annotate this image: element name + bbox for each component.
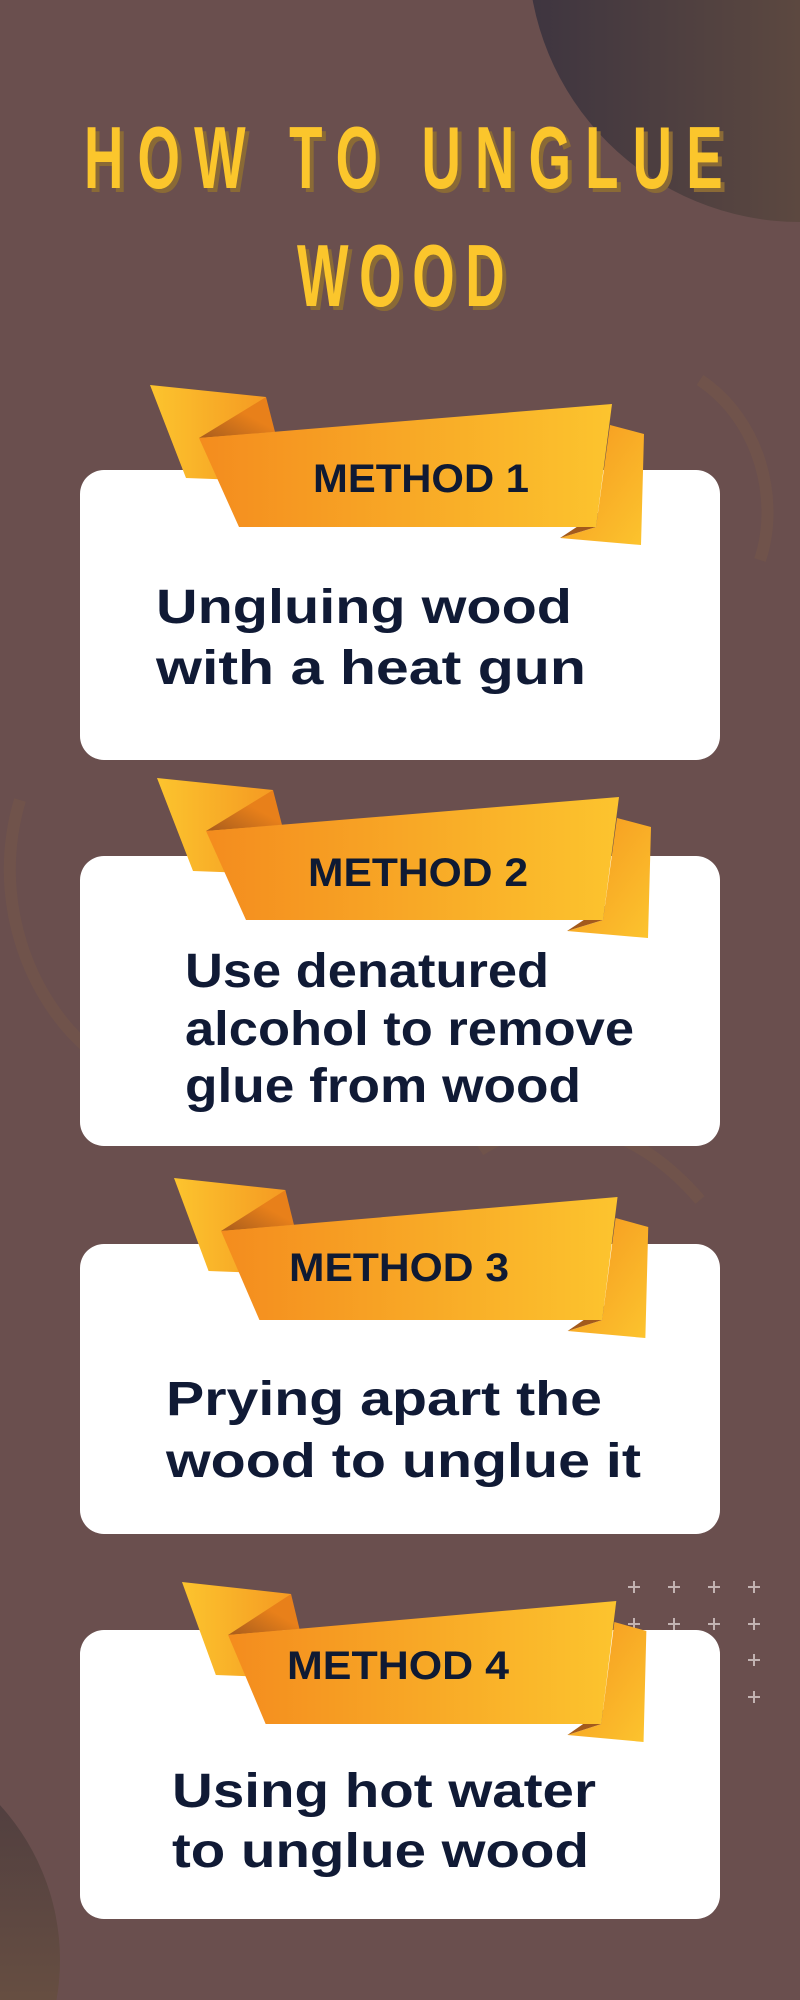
text: method 2 bbox=[185, 945, 634, 1113]
ribbon: method 3 bbox=[174, 1178, 648, 1338]
text: method 3: Prying apart the bbox=[166, 1373, 602, 1426]
title: WOOD bbox=[301, 231, 509, 329]
ribbon: method 2: METHOD 2 bbox=[308, 851, 528, 895]
text: method 2: alcohol to remove bbox=[185, 1003, 634, 1056]
ribbon: method 2 bbox=[157, 778, 651, 938]
text: method 3 bbox=[165, 1373, 641, 1488]
ribbon: method 4: METHOD 4 bbox=[287, 1644, 510, 1688]
decorative circle bottom left bbox=[0, 1730, 60, 2000]
title: WOOD bbox=[297, 227, 505, 325]
plus grid decoration bbox=[628, 1581, 760, 1703]
ribbon: method 1: METHOD 1 bbox=[313, 457, 529, 501]
text: method 2: Use denatured bbox=[185, 945, 549, 998]
text: method 1 bbox=[155, 581, 586, 695]
ribbon: method 4 bbox=[182, 1582, 646, 1742]
decorative circle top right bbox=[528, 0, 800, 222]
text: method 4: to unglue wood bbox=[172, 1825, 589, 1878]
card 4 bbox=[80, 1582, 720, 1919]
ribbon: method 1 bbox=[150, 385, 644, 545]
title: HOW TO UNGLUE bbox=[88, 113, 727, 211]
text: method 1: Ungluing wood bbox=[156, 581, 572, 634]
card 3 bbox=[80, 1178, 720, 1534]
text: method 1: with a heat gun bbox=[155, 642, 586, 695]
title bbox=[84, 109, 727, 329]
card 2 bbox=[80, 778, 720, 1146]
faint leaf decorations bbox=[10, 380, 768, 1200]
text: method 3: wood to unglue it bbox=[165, 1435, 641, 1488]
text: method 2: glue from wood bbox=[185, 1060, 581, 1113]
text: method 4: Using hot water bbox=[172, 1765, 596, 1818]
text: method 4 bbox=[172, 1765, 596, 1878]
card 1 bbox=[80, 385, 720, 760]
title: HOW TO UNGLUE bbox=[84, 109, 723, 207]
ribbon: method 3: METHOD 3 bbox=[289, 1246, 509, 1290]
